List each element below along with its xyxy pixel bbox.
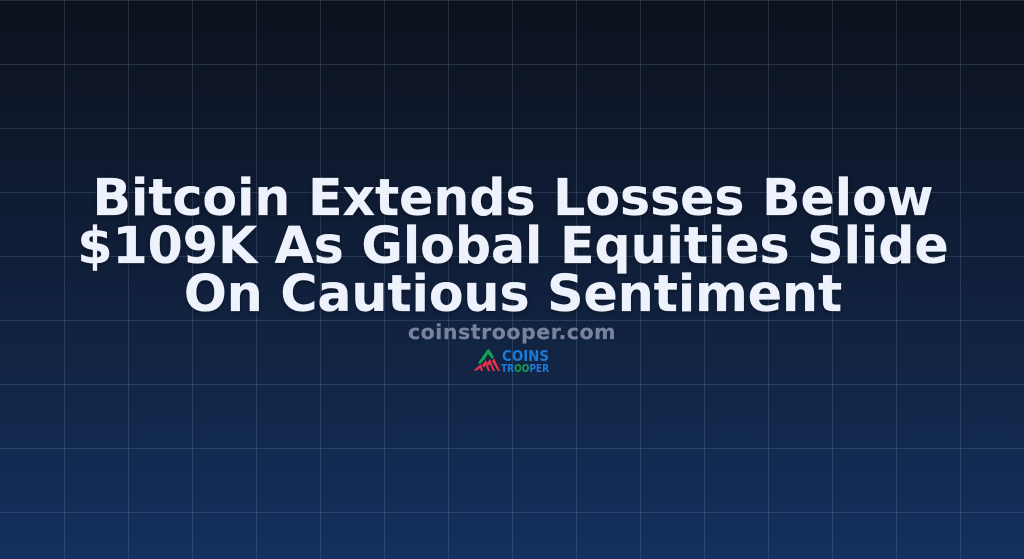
website label: coinstrooper.com xyxy=(408,320,616,344)
title: On Cautious Sentiment xyxy=(184,264,842,323)
title: Bitcoin Extends Losses Below xyxy=(93,168,933,227)
title: $109K As Global Equities Slide xyxy=(77,216,949,275)
logo: coins trooper xyxy=(474,347,549,375)
wordmark: TROOPER xyxy=(501,362,549,375)
icon: green and red chart peaks xyxy=(474,349,500,371)
title xyxy=(77,168,949,323)
wordmark xyxy=(501,347,549,375)
wordmark: COINS xyxy=(502,347,549,365)
